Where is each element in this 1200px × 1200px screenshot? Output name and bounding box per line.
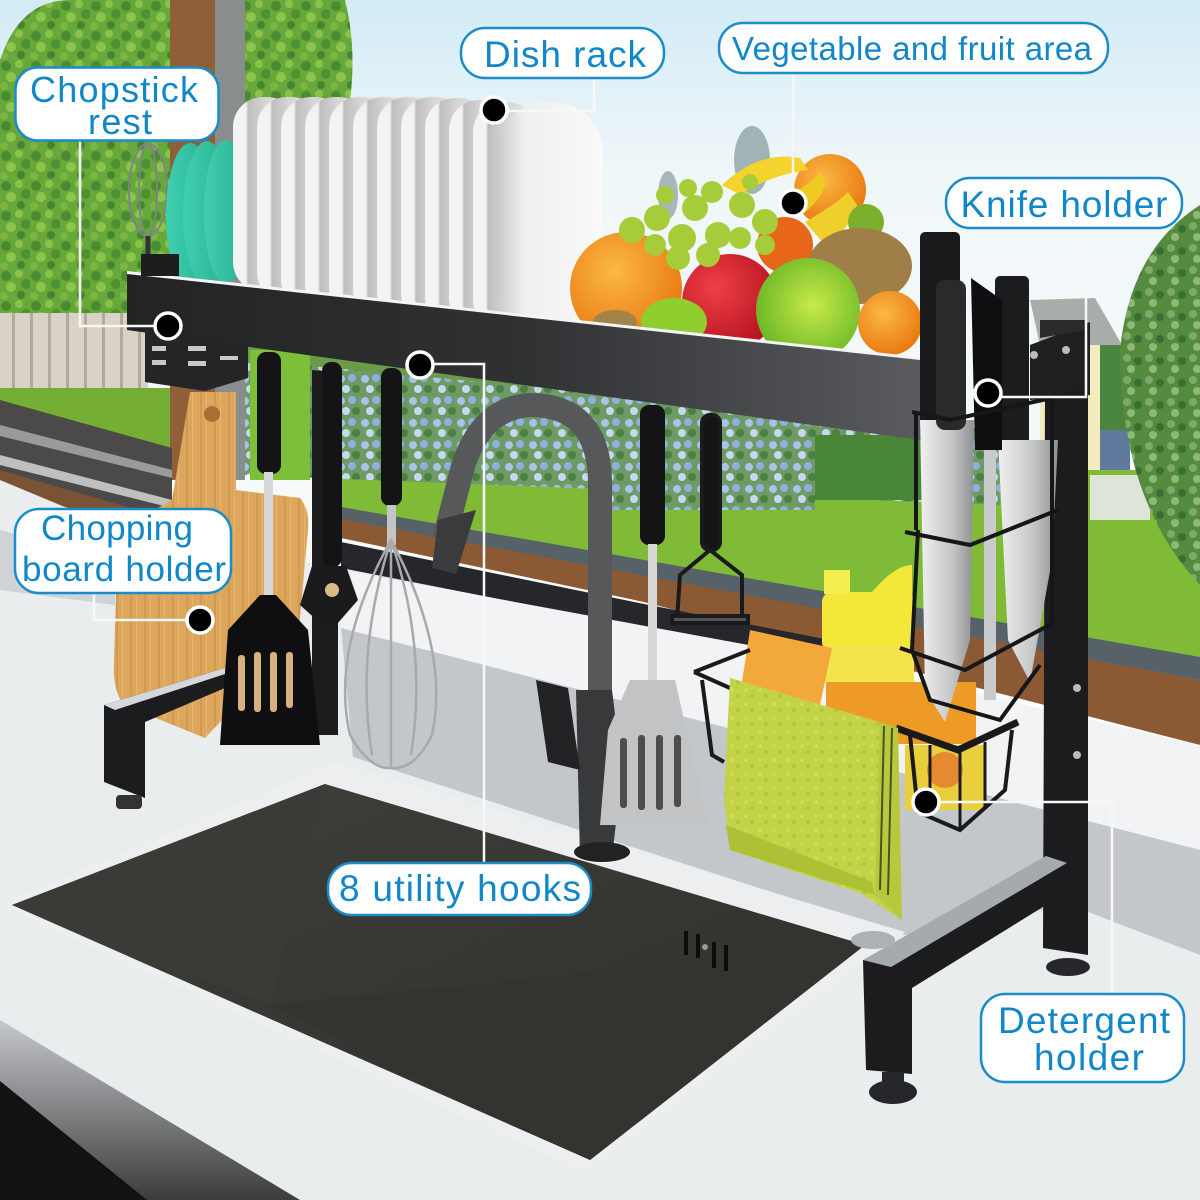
callout dots xyxy=(155,97,1001,815)
utensil: slotted turner xyxy=(220,352,320,745)
utensil: metal spatula xyxy=(600,405,708,825)
utensil: pasta server xyxy=(300,362,358,632)
knives and knife holder xyxy=(900,232,1058,722)
whisk in chopstick rest xyxy=(129,144,167,262)
label: Knife holder: Knife holder xyxy=(960,184,1168,225)
sponge xyxy=(742,630,832,705)
utensil: wire whisk xyxy=(345,368,436,768)
chopstick basket xyxy=(141,254,248,391)
teal bowls xyxy=(166,140,248,287)
green towel xyxy=(724,678,902,920)
rack frame legs xyxy=(104,370,1090,1104)
label: Chopping board holder: board holder xyxy=(22,550,226,589)
label: Detergent holder xyxy=(981,994,1184,1082)
label: Detergent holder: Detergent xyxy=(998,1000,1171,1041)
stack of white plates xyxy=(233,97,603,334)
label: 8 utility hooks: 8 utility hooks xyxy=(339,868,581,909)
label: Chopstick rest: rest xyxy=(88,101,152,142)
label: Detergent holder: holder xyxy=(1034,1037,1144,1078)
label: Vegetable and fruit area xyxy=(719,23,1108,73)
utensil: potato masher xyxy=(672,415,748,623)
label: Dish rack xyxy=(461,28,664,78)
label: Chopstick rest: Chopstick xyxy=(30,69,199,110)
window frame xyxy=(0,0,1200,745)
right bracket xyxy=(1030,320,1090,400)
label: Vegetable and fruit area: Vegetable and fruit area xyxy=(732,30,1093,67)
sink basin xyxy=(0,762,905,1172)
hanging utensils on hooks xyxy=(220,352,748,825)
leader lines xyxy=(80,74,1112,994)
label: Chopstick rest xyxy=(16,68,218,142)
background: sky and garden through window xyxy=(0,0,1200,700)
countertop xyxy=(0,480,1200,1200)
label: Chopping board holder: Chopping xyxy=(41,509,193,548)
wire caddy xyxy=(694,650,1018,830)
detergent bottle xyxy=(822,565,985,810)
label: Dish rack: Dish rack xyxy=(484,34,646,75)
chopping board xyxy=(114,392,308,738)
faucet xyxy=(432,405,630,862)
fruit pile xyxy=(570,154,922,362)
label: Chopping board holder xyxy=(15,509,231,593)
shelf tray xyxy=(127,271,940,440)
